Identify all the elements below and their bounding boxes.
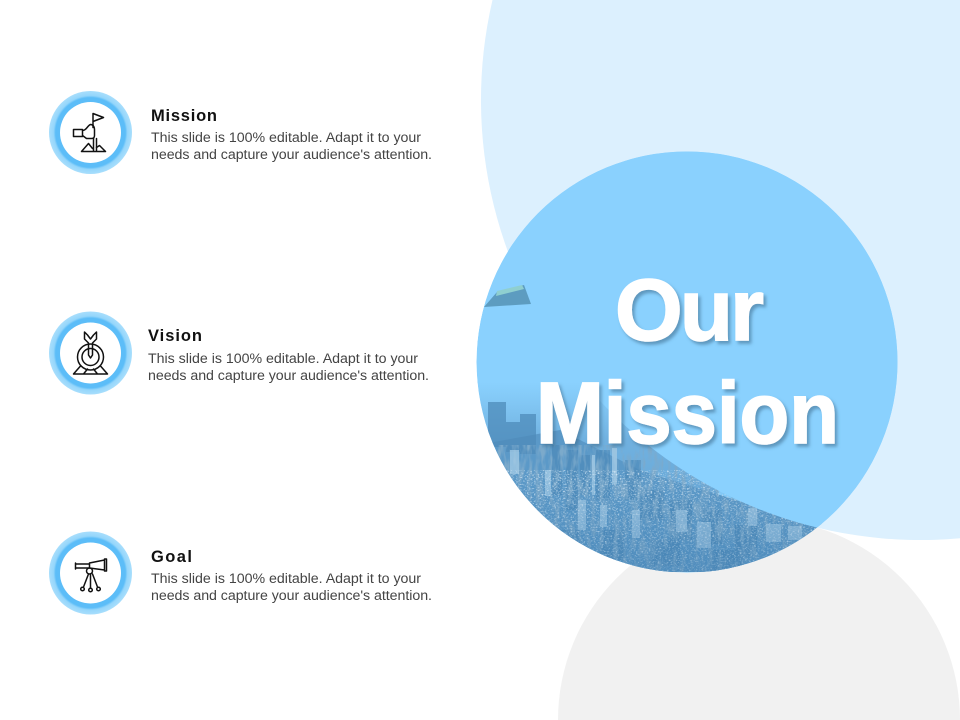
item: Vision: needs and capture your audience's attention. [148, 368, 429, 384]
description: This slide is 100% editable. Adapt it to your [151, 130, 421, 146]
title: Our Mission: Our [615, 262, 764, 359]
city skyline photo [477, 382, 830, 572]
circle fill [476, 152, 898, 572]
item: Mission: needs and capture your audience's attention. [151, 147, 432, 163]
icon: hand holding flag on mountain [49, 91, 132, 174]
title: Our Mission [536, 262, 839, 462]
heading: Mission [151, 107, 217, 125]
heading: Goal [151, 548, 192, 566]
item: Goal [49, 532, 432, 614]
description: This slide is 100% editable. Adapt it to your [148, 351, 418, 367]
item: Goal: needs and capture your audience's attention. [151, 588, 432, 604]
icon: telescope on tripod [49, 532, 132, 614]
pale circle overlay tinted blue [508, 152, 898, 528]
background circle: pale blue [481, 0, 960, 540]
main circle with city photo [476, 152, 898, 572]
title: Our Mission: Mission [536, 365, 839, 462]
item: Vision [49, 312, 429, 394]
item: Mission [49, 91, 432, 174]
glider wing in photo [484, 285, 531, 307]
background circle: grey [558, 519, 960, 720]
heading: Vision [148, 327, 202, 345]
icon: arrow in target [49, 312, 132, 394]
description: This slide is 100% editable. Adapt it to your [151, 571, 421, 587]
